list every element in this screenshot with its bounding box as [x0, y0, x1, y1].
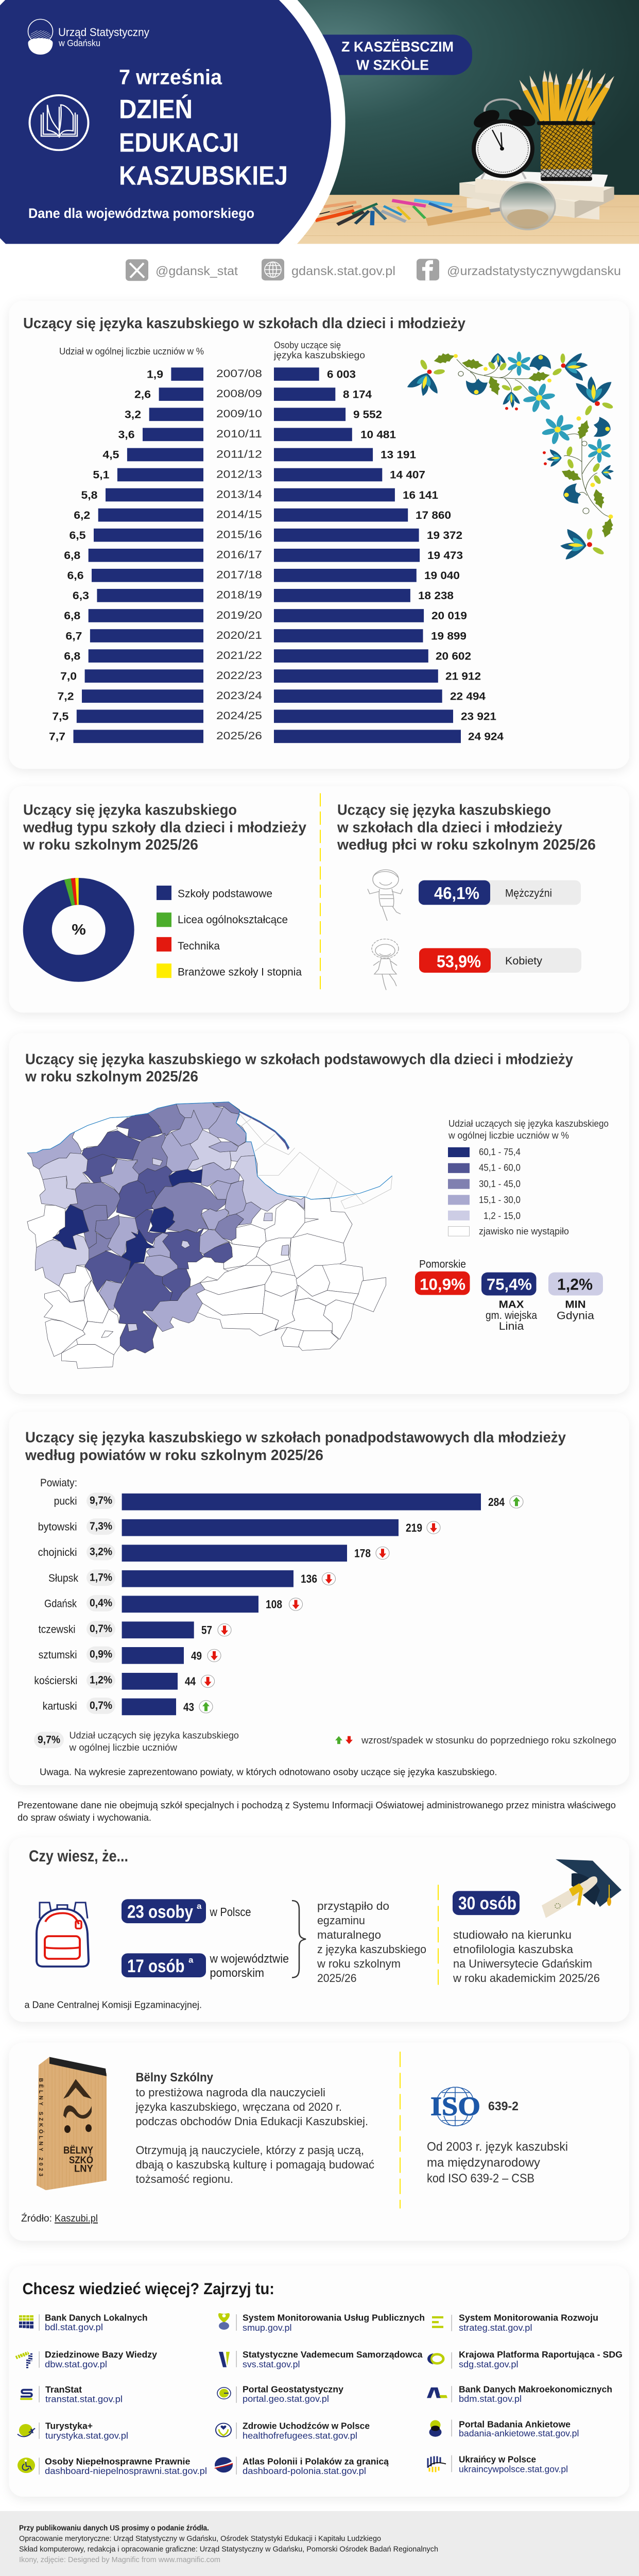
row: kartuski: 43	[183, 1701, 194, 1714]
row: kartuski	[43, 1698, 213, 1715]
row: kościerski: kościerski	[34, 1674, 77, 1687]
note: Uwaga. Na wykresie zaprezentowano powiaty, w których odnotowano osoby uczące się języka kaszubskiego.	[40, 1767, 497, 1777]
panel: upper-secondary schools by county	[9, 1412, 629, 1785]
heading: w roku szkolnym 2025/26	[25, 1069, 198, 1085]
stat badge: 23 persons in Poland: 23 osoby	[127, 1902, 193, 1922]
bar chart: number of learners: 22 494	[450, 690, 486, 702]
callout: maximum 75.4%	[481, 1273, 538, 1332]
heading	[25, 1429, 566, 1464]
row: bytowski: bytowski	[38, 1520, 77, 1533]
callout: minimum 1.2%: Gdynia	[557, 1309, 595, 1322]
legend: share pill	[34, 1730, 239, 1753]
link: Atlas Polonii i Polaków za granicą	[215, 2456, 389, 2476]
donut chart: school types	[38, 878, 120, 969]
text block: award: to prestiżowa nagroda dla nauczycieli	[136, 2086, 325, 2099]
year labels: 2016/17	[216, 548, 262, 561]
panel: did you know	[9, 1838, 629, 2022]
year labels: 2023/24	[216, 689, 262, 702]
callout: Kashubian slogan badge: W SZKÒLE	[356, 56, 429, 73]
legend: map classes: 60,1 - 75,4	[479, 1146, 521, 1158]
legend: share pill: w ogólnej liczbie uczniów	[69, 1742, 177, 1753]
icon: boy	[368, 870, 403, 921]
bar chart: share in %: 6,7	[65, 630, 82, 642]
callout: Kashubian slogan badge: Z KASZËBSCZIM	[341, 39, 454, 55]
year labels: 2022/23	[216, 669, 262, 682]
stat badge: 23 persons in Poland: a	[197, 1902, 202, 1911]
year labels: 2010/11	[216, 428, 262, 440]
row: kościerski: 44	[185, 1675, 196, 1688]
link: Osoby Niepełnosprawne Prawnie: dashboard-niepelnosprawni.stat.gov.pl	[45, 2466, 207, 2476]
bar chart: number of learners: 23 921	[461, 710, 496, 722]
image: award statuette: BËLNY	[63, 2145, 93, 2156]
axis label: persons: Osoby uczące się	[274, 340, 341, 351]
text block: award: tożsamość regionu.	[136, 2173, 233, 2185]
text block: ethnophilology studies: etnofilologia kaszubska	[453, 1943, 573, 1956]
bar chart: share in %: 7,7	[49, 730, 65, 742]
stat badge: 23 persons in Poland	[122, 1899, 251, 1923]
link: Portal Geostatystyczny: portal.geo.stat.gov.pl	[243, 2394, 329, 2404]
image: award statuette	[37, 2057, 107, 2190]
text: website: gdansk.stat.gov.pl	[291, 264, 395, 278]
year labels: 2018/19	[216, 588, 262, 601]
panel: Bëlny Szkólny award and ISO code	[9, 2043, 629, 2241]
legend: map classes: 45,1 - 60,0	[479, 1162, 521, 1173]
bar chart: share in %: 1,9	[147, 368, 163, 380]
year labels: 2011/12	[216, 448, 262, 460]
icon: X	[126, 259, 148, 281]
row: pucki: 9,7%	[90, 1494, 112, 1506]
link: Ukraińcy w Polsce: ukraincywpolsce.stat.gov.pl	[459, 2464, 568, 2474]
bar chart: share in %: 5,8	[81, 488, 97, 501]
legend: change arrows: wzrost/spadek w stosunku do poprzedniego roku szkolnego	[361, 1735, 616, 1746]
heading: Uczący się języka kaszubskiego w szkołach ponadpodstawowych dla młodzieży	[25, 1429, 566, 1446]
subheading: region: Dane dla województwa pomorskiego	[28, 206, 254, 221]
text block: ethnophilology studies: na Uniwersytecie Gdańskim	[453, 1957, 592, 1970]
bar chart: share in %: 6,8	[64, 650, 80, 662]
photo: blackboard and school items	[293, 0, 639, 244]
heading: Dzień Edukacji Kaszubskiej: EDUKACJI	[119, 128, 239, 158]
legend: map classes: 15,1 - 30,0	[479, 1195, 521, 1206]
link: Portal Geostatystyczny: Portal Geostatystyczny	[243, 2384, 344, 2394]
icon: Facebook	[417, 259, 439, 280]
legend: map classes	[448, 1118, 609, 1237]
brace	[292, 1901, 306, 1977]
footer	[0, 2511, 639, 2576]
legend: school types: Licea ogólnokształcące	[178, 913, 288, 926]
row: kościerski	[34, 1672, 215, 1690]
text block: ISO code: kod ISO 639-2 – CSB	[427, 2172, 534, 2185]
heading: gender: w szkołach dla dzieci i młodzieży	[337, 819, 562, 836]
link: Zdrowie Uchodźców w Polsce: healthofrefugees.stat.gov.pl	[243, 2430, 357, 2441]
bar chart: number of learners: 19 899	[431, 630, 467, 642]
text: Facebook handle: @urzadstatystycznywgdansku	[447, 264, 621, 278]
year labels: 2017/18	[216, 568, 262, 581]
heading: school type	[23, 802, 306, 853]
bar chart: share in %: 6,3	[73, 589, 89, 602]
row: chojnicki: 3,2%	[90, 1545, 112, 1557]
label: counties: Powiaty:	[40, 1477, 77, 1489]
footnote: a Dane Centralnej Komisji Egzaminacyjnej.	[25, 1999, 202, 2010]
row: Gdańsk	[44, 1595, 303, 1613]
callout: minimum 1.2%: MIN	[565, 1298, 586, 1311]
progress bar: women 53.9%: Kobiety	[505, 955, 543, 967]
progress bar: men 46.1%	[419, 880, 581, 905]
link: System Monitorowania Usług Publicznych: System Monitorowania Usług Publicznych	[243, 2312, 425, 2323]
link: Dziedzinowe Bazy Wiedzy: dbw.stat.gov.pl	[45, 2359, 107, 2369]
choropleth map: Pomeranian municipalities	[27, 1102, 392, 1368]
footer: Ikony, zdjęcie: Designed by Magnific from www.magnific.com	[19, 2555, 220, 2564]
row: chojnicki: 178	[354, 1547, 371, 1560]
text block: matura exam: maturalnego	[317, 1928, 381, 1941]
link: Zdrowie Uchodźców w Polsce: Zdrowie Uchodźców w Polsce	[243, 2420, 370, 2431]
stat badge: 17 persons in Pomerania: pomorskim	[210, 1967, 264, 1980]
bar chart: number of learners: 13 191	[381, 448, 416, 461]
image: award statuette: LNY	[74, 2163, 93, 2175]
row: tczewski: tczewski	[38, 1623, 75, 1635]
bar chart: share in %: 7,0	[60, 670, 77, 682]
legend: school types: Branżowe szkoły I stopnia	[178, 965, 302, 978]
link: Portal Badania Ankietowe	[429, 2419, 579, 2438]
row: tczewski: 57	[201, 1623, 212, 1637]
bar chart: number of learners: 20 602	[436, 650, 471, 662]
logo: ISO	[430, 2087, 519, 2126]
text block: ISO code: Od 2003 r. język kaszubski	[427, 2140, 568, 2154]
row: pucki	[54, 1493, 523, 1510]
legend: map classes: w ogólnej liczbie uczniów w %	[448, 1130, 569, 1141]
bar chart: number of learners: 17 860	[416, 509, 451, 521]
image: award statuette: SZKÓ	[69, 2154, 93, 2166]
bar chart: number of learners: 24 924	[468, 730, 504, 742]
heading: Uczący się języka kaszubskiego w szkołach podstawowych dla dzieci i młodzieży	[25, 1051, 573, 1067]
social media row	[126, 259, 621, 281]
row: chojnicki	[38, 1544, 389, 1562]
heading: według powiatów w roku szkolnym 2025/26	[25, 1447, 323, 1464]
row: Gdańsk: Gdańsk	[44, 1597, 77, 1609]
year labels: 2021/22	[216, 649, 262, 662]
link: TranStat: TranStat	[45, 2384, 82, 2395]
bar chart: share in %	[49, 367, 203, 743]
callout: minimum 1.2%	[548, 1273, 603, 1322]
link: Statystyczne Vademecum Samorządowca: svs.stat.gov.pl	[243, 2359, 300, 2369]
text block: data note	[18, 1800, 616, 1823]
logo: ISO: 639-2	[488, 2099, 519, 2113]
bar chart: number of learners: 19 040	[424, 569, 460, 582]
link: Statystyczne Vademecum Samorządowca: Statystyczne Vademecum Samorządowca	[243, 2349, 423, 2360]
heading: Czy wiesz, że...	[29, 1846, 128, 1865]
link: Portal Geostatystyczny	[217, 2384, 344, 2404]
link: Dziedzinowe Bazy Wiedzy: Dziedzinowe Bazy Wiedzy	[45, 2349, 158, 2360]
bar chart: share in %: 6,5	[70, 529, 86, 541]
bar chart: counties	[34, 1493, 523, 1715]
legend: school types: Szkoły podstawowe	[178, 887, 272, 900]
row: kartuski: 0,7%	[90, 1699, 112, 1711]
heading: school type: według typu szkoły dla dzieci i młodzieży	[23, 819, 306, 836]
row: kościerski: 1,2%	[90, 1673, 112, 1686]
panel: learners over time	[9, 301, 629, 769]
text: X handle: @gdansk_stat	[156, 264, 238, 278]
stat badge: 17 persons in Pomerania: w województwie	[210, 1952, 289, 1965]
link: System Monitorowania Usług Publicznych: smup.gov.pl	[243, 2322, 292, 2333]
text block: matura exam: 2025/26	[317, 1972, 357, 1985]
row: Słupsk: 136	[301, 1572, 317, 1585]
year labels: 2012/13	[216, 468, 262, 480]
link: Krajowa Platforma Raportująca - SDG: Krajowa Platforma Raportująca - SDG	[459, 2349, 623, 2360]
icon: graduation cap and diploma	[542, 1859, 621, 1918]
row: bytowski: 7,3%	[90, 1520, 112, 1532]
heading: date: 7 września	[119, 65, 222, 89]
legend: map classes: 1,2 - 15,0	[483, 1211, 521, 1222]
axis label: persons	[273, 340, 365, 361]
text block: award: podczas obchodów Dnia Edukacji Kaszubskiej.	[136, 2115, 368, 2128]
bar chart: number of learners: 19 473	[427, 549, 463, 562]
row: kartuski: kartuski	[43, 1700, 77, 1712]
bar chart: share in %: 6,8	[64, 549, 80, 562]
logo: Urząd Statystyczny w Gdańsku	[28, 19, 149, 55]
stat badge: 17 persons in Pomerania: a	[188, 1956, 194, 1964]
panel: map of primary schools	[9, 1033, 629, 1394]
bar chart: share in %: 4,5	[102, 448, 119, 461]
callout: Pomorskie 10.9%: 10,9%	[420, 1275, 465, 1293]
bar chart: number of learners: 6 003	[327, 368, 356, 380]
link: System Monitorowania Usług Publicznych	[218, 2312, 425, 2333]
link: Bank Danych Makroekonomicznych: Bank Danych Makroekonomicznych	[459, 2384, 612, 2394]
bar chart: number of learners: 8 174	[343, 388, 372, 400]
icon: open book in circle	[30, 95, 89, 150]
row: sztumski	[39, 1647, 221, 1664]
row: bytowski: 219	[406, 1521, 422, 1534]
year labels: 2019/20	[216, 609, 262, 621]
bar chart: number of learners: 9 552	[353, 408, 382, 420]
footer: Opracowanie merytoryczne: Urząd Statystyczny w Gdańsku, Ośrodek Statystyki Edukacji i Kapitału Ludzkiego	[19, 2534, 381, 2543]
image: award statuette: BËLNY SZKÓLNY 2023	[38, 2078, 44, 2176]
panel: links	[9, 2266, 629, 2497]
link: Bank Danych Makroekonomicznych	[427, 2384, 612, 2404]
bar chart: number of learners	[274, 367, 504, 743]
text block: award: dbają o kaszubską kulturę i pomagają budować	[136, 2158, 374, 2171]
callout: maximum 75.4%: 75,4%	[487, 1275, 532, 1293]
row: sztumski: sztumski	[39, 1649, 77, 1661]
year labels	[216, 367, 262, 742]
stat badge: 17 persons in Pomerania: 17 osób	[127, 1956, 184, 1976]
axis label: share: Udział w ogólnej liczbie uczniów w %	[59, 346, 204, 357]
link: Osoby Niepełnosprawne Prawnie: Osoby Niepełnosprawne Prawnie	[45, 2456, 191, 2466]
header banner	[0, 0, 639, 244]
link: Krajowa Platforma Raportująca - SDG	[427, 2349, 623, 2369]
row: pucki: pucki	[54, 1495, 77, 1507]
text block: ethnophilology studies	[453, 1928, 600, 1985]
year labels: 2015/16	[216, 528, 262, 540]
row: Gdańsk: 0,4%	[90, 1597, 112, 1609]
link: Ukraińcy w Polsce	[428, 2454, 568, 2474]
heading: gender: według płci w roku szkolnym 2025/26	[337, 837, 596, 853]
source: Kaszubi.pl	[55, 2213, 98, 2224]
link: Atlas Polonii i Polaków za granicą: Atlas Polonii i Polaków za granicą	[243, 2456, 389, 2466]
row: tczewski: 0,7%	[90, 1622, 112, 1635]
link: Bank Danych Lokalnych: bdl.stat.gov.pl	[45, 2321, 103, 2332]
text block: matura exam: egzaminu	[317, 1914, 365, 1927]
year labels: 2014/15	[216, 508, 262, 520]
bar chart: number of learners: 14 407	[390, 468, 425, 481]
row: Słupsk	[48, 1569, 335, 1587]
link: System Monitorowania Rozwoju: strateg.stat.gov.pl	[459, 2322, 532, 2333]
link: Statystyczne Vademecum Samorządowca	[219, 2349, 423, 2369]
progress bar: men 46.1%: Mężczyźni	[505, 887, 552, 899]
link: Turystyka+: Turystyka+	[45, 2420, 93, 2431]
link: Krajowa Platforma Raportująca - SDG: sdg.stat.gov.pl	[459, 2359, 519, 2369]
bar chart: number of learners: 20 019	[431, 609, 467, 622]
bar chart: share in %: 7,5	[52, 710, 68, 722]
legend: share pill: 9,7%	[38, 1733, 60, 1745]
heading: Chcesz wiedzieć więcej? Zajrzyj tu:	[23, 2279, 274, 2298]
legend: school types	[157, 886, 302, 978]
bar chart: share in %: 2,6	[134, 388, 151, 400]
text block: award	[135, 2071, 374, 2185]
footer: Skład komputerowy, redakcja i opracowanie graficzne: Urząd Statystyczny w Gdańsku, Pomorski Ośrodek Badań Regionalnych	[19, 2545, 438, 2553]
link: TranStat	[20, 2384, 123, 2404]
bar chart: share in %: 5,1	[93, 468, 109, 481]
progress bar: men 46.1%: 46,1%	[434, 884, 479, 903]
link: Zdrowie Uchodźców w Polsce	[216, 2420, 370, 2441]
progress bar: women 53.9%	[419, 948, 581, 973]
text block: ISO code: ma międzynarodowy	[427, 2156, 540, 2170]
text block: award: Bëlny Szkólny	[136, 2071, 213, 2084]
bar chart: number of learners: 21 912	[445, 670, 481, 682]
progress bar: women 53.9%: 53,9%	[437, 952, 481, 971]
icon: globe	[262, 259, 284, 280]
legend: share pill: Udział uczących się języka kaszubskiego	[69, 1730, 239, 1741]
bar chart: number of learners: 19 372	[427, 529, 462, 541]
callout: minimum 1.2%: 1,2%	[557, 1275, 593, 1293]
callout: Pomorskie 10.9%	[415, 1258, 470, 1295]
icon: backpack	[37, 1903, 89, 1967]
text block: matura exam: z języka kaszubskiego	[317, 1943, 426, 1956]
bar chart: share in %: 6,2	[74, 509, 90, 521]
text block: data note: do spraw oświaty i wychowania.	[18, 1812, 151, 1823]
axis label: persons: języka kaszubskiego	[273, 350, 365, 361]
year labels: 2008/09	[216, 387, 262, 400]
heading: school type: w roku szkolnym 2025/26	[23, 837, 198, 853]
link: Bank Danych Lokalnych	[19, 2312, 147, 2332]
callout: maximum 75.4%: MAX	[499, 1298, 524, 1311]
link: Ukraińcy w Polsce: Ukraińcy w Polsce	[459, 2454, 536, 2465]
text block: matura exam: przystąpiło do	[317, 1900, 389, 1912]
callout: maximum 75.4%: gm. wiejska	[486, 1309, 538, 1321]
year labels: 2013/14	[216, 488, 262, 500]
text block: matura exam	[317, 1900, 426, 1985]
donut chart: school types: %	[72, 922, 86, 938]
bar chart: number of learners: 16 141	[403, 488, 438, 501]
link: System Monitorowania Rozwoju	[432, 2312, 598, 2333]
stat badge: 23 persons in Poland: w Polsce	[210, 1906, 251, 1919]
logo: Urząd Statystyczny w Gdańsku: w Gdańsku	[58, 38, 100, 48]
row: Słupsk: Słupsk	[48, 1572, 79, 1584]
row: Gdańsk: 108	[266, 1598, 282, 1611]
heading: Uczący się języka kaszubskiego w szkołach dla dzieci i młodzieży	[23, 315, 465, 332]
text block: ISO code	[427, 2140, 568, 2185]
stat badge: 30 persons	[453, 1891, 520, 1915]
link: Portal Badania Ankietowe: Portal Badania Ankietowe	[459, 2419, 571, 2429]
heading: gender: Uczący się języka kaszubskiego	[337, 802, 551, 818]
legend: map classes: Udział uczących się języka kaszubskiego	[448, 1118, 609, 1129]
link: TranStat: transtat.stat.gov.pl	[45, 2394, 123, 2404]
link: Bank Danych Makroekonomicznych: bdm.stat.gov.pl	[459, 2394, 522, 2404]
legend: school types: Technika	[178, 940, 220, 952]
link: Portal Badania Ankietowe: badania-ankietowe.stat.gov.pl	[459, 2428, 579, 2438]
bar chart: share in %: 6,8	[64, 609, 80, 622]
callout: maximum 75.4%: Linia	[499, 1319, 524, 1332]
link: Turystyka+: turystyka.stat.gov.pl	[45, 2430, 128, 2441]
link: Turystyka+	[18, 2420, 128, 2441]
callout: Kashubian slogan badge	[322, 35, 472, 75]
text block: matura exam: w roku szkolnym	[317, 1957, 401, 1970]
bar chart: number of learners: 18 238	[418, 589, 454, 602]
text block: ethnophilology studies: w roku akademickim 2025/26	[453, 1972, 600, 1985]
source: Źródło:	[21, 2212, 52, 2224]
bar chart: share in %: 7,2	[58, 690, 74, 702]
icon: girl	[372, 939, 399, 990]
callout: Pomorskie 10.9%: Pomorskie	[419, 1258, 466, 1270]
link: Bank Danych Lokalnych: Bank Danych Lokalnych	[45, 2312, 147, 2323]
panel: school type and gender	[9, 786, 629, 1012]
link: Atlas Polonii i Polaków za granicą: dashboard-polonia.stat.gov.pl	[243, 2466, 366, 2476]
year labels: 2024/25	[216, 709, 262, 722]
row: sztumski: 49	[191, 1649, 202, 1662]
decoration: Kashubian floral ornament	[406, 351, 615, 561]
heading: Dzień Edukacji Kaszubskiej: KASZUBSKIEJ	[119, 161, 288, 191]
heading: Dzień Edukacji Kaszubskiej: DZIEŃ	[119, 94, 193, 124]
row: pucki: 284	[488, 1496, 505, 1509]
heading: Dzień Edukacji Kaszubskiej	[119, 94, 288, 191]
row: sztumski: 0,9%	[90, 1648, 112, 1660]
bar chart: share in %: 6,6	[67, 569, 84, 582]
link: Osoby Niepełnosprawne Prawnie	[18, 2456, 207, 2476]
heading: gender	[337, 802, 596, 853]
row: Słupsk: 1,7%	[90, 1571, 112, 1583]
heading	[25, 1051, 573, 1085]
row: tczewski	[38, 1621, 231, 1638]
logo: Urząd Statystyczny w Gdańsku: Urząd Statystyczny	[58, 26, 149, 39]
year labels: 2009/10	[216, 408, 262, 420]
legend: map classes: 30,1 - 45,0	[479, 1179, 521, 1190]
bar chart: number of learners: 10 481	[360, 428, 396, 440]
logo: ISO: ISO	[430, 2092, 480, 2121]
year labels: 2025/26	[216, 730, 262, 742]
footer: Przy publikowaniu danych US prosimy o podanie źródła.	[19, 2524, 209, 2532]
heading: school type: Uczący się języka kaszubskiego	[23, 802, 237, 818]
row: bytowski	[38, 1518, 440, 1536]
source	[21, 2212, 98, 2224]
link: System Monitorowania Rozwoju: System Monitorowania Rozwoju	[459, 2312, 598, 2323]
link: Dziedzinowe Bazy Wiedzy	[16, 2349, 158, 2369]
legend: map classes: zjawisko nie wystąpiło	[479, 1226, 569, 1237]
stat badge: 17 persons in Pomerania	[122, 1952, 289, 1980]
row: chojnicki: chojnicki	[38, 1546, 77, 1558]
text block: award: Otrzymują ją nauczyciele, którzy z pasją uczą,	[136, 2144, 364, 2157]
text block: award: języka kaszubskiego, wręczana od 2020 r.	[135, 2100, 342, 2113]
stat badge: 30 persons: 30 osób	[458, 1893, 516, 1913]
bar chart: share in %: 3,2	[125, 408, 141, 420]
year labels: 2007/08	[216, 367, 262, 380]
bar chart: share in %: 3,6	[118, 428, 134, 440]
text block: ethnophilology studies: studiowało na kierunku	[453, 1928, 572, 1941]
year labels: 2020/21	[216, 629, 262, 641]
